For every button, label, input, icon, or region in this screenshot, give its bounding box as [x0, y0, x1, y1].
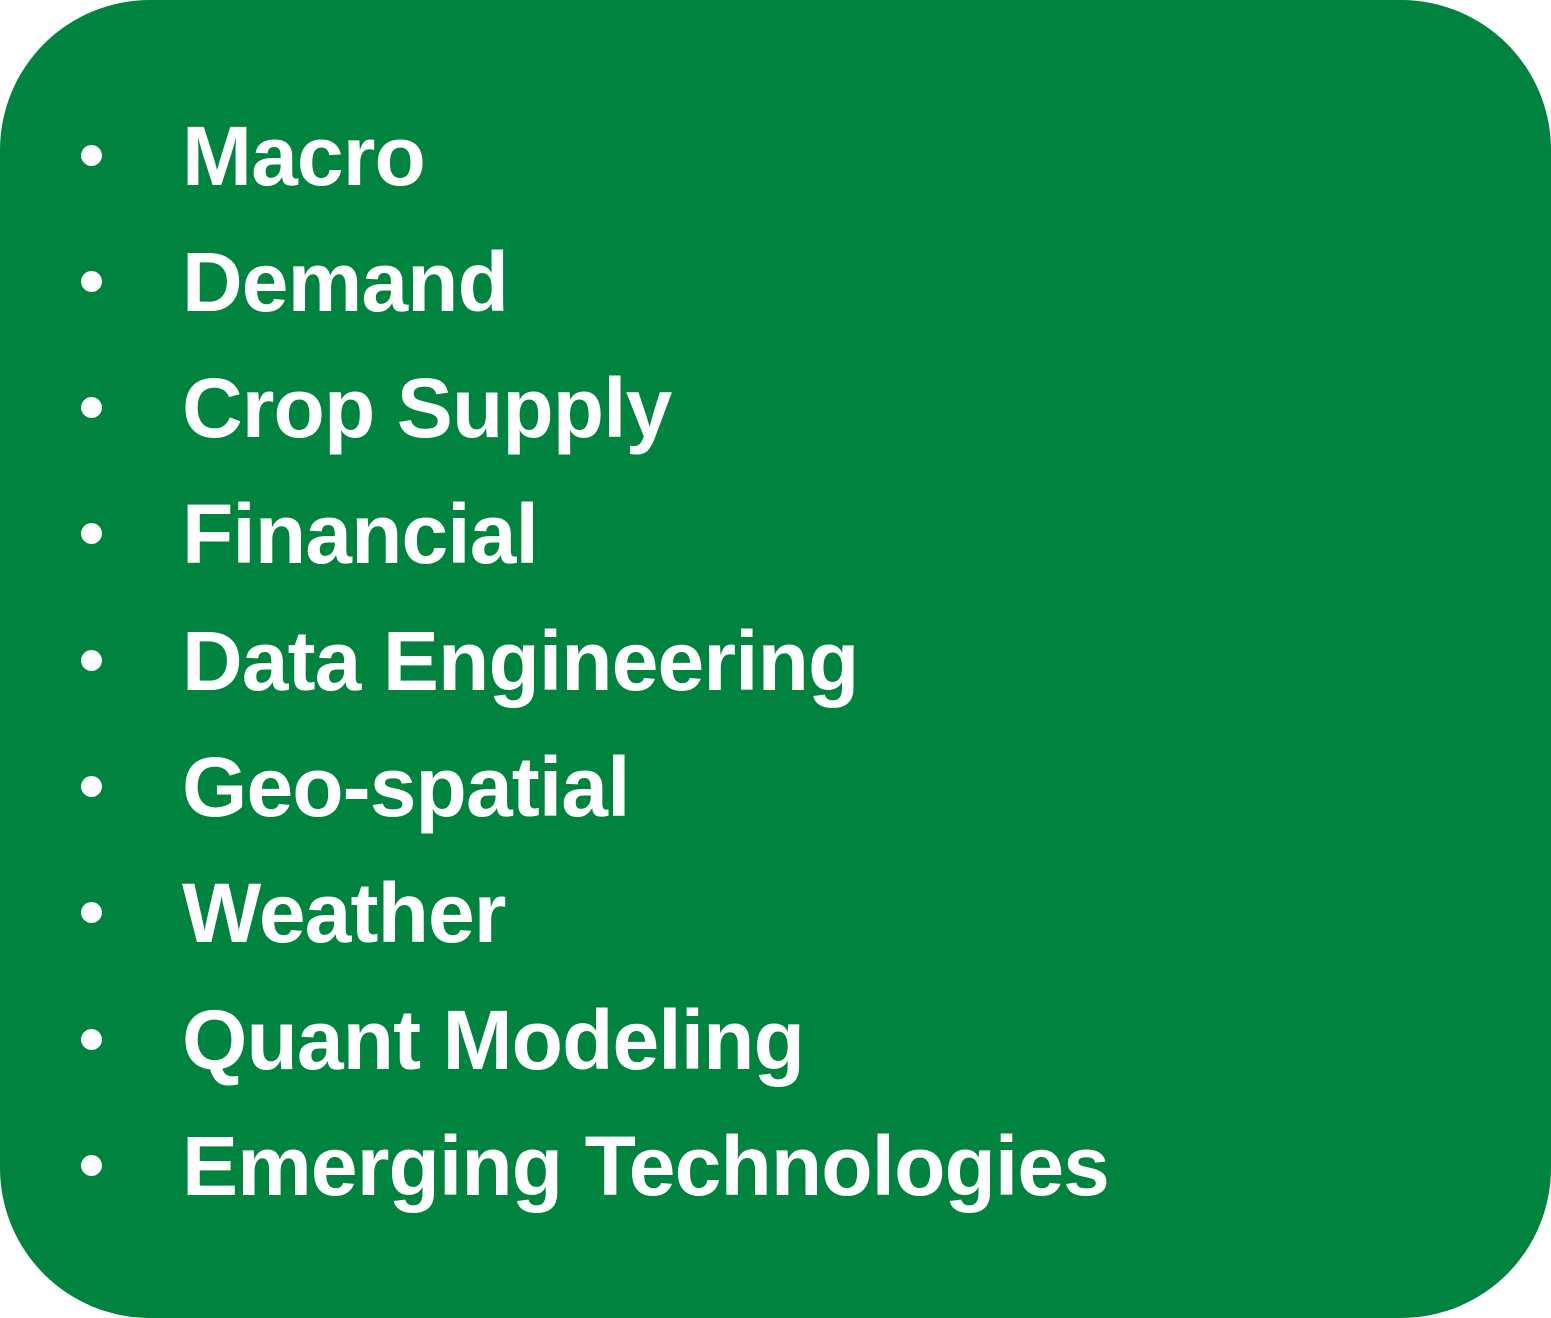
- item: Macro: Macro: [182, 109, 425, 203]
- item: Weather: Weather: [182, 866, 506, 960]
- item: Crop Supply: Crop Supply: [182, 361, 671, 455]
- item: Emerging Technologies: Emerging Technologies: [182, 1119, 1109, 1213]
- item: Quant Modeling: Quant Modeling: [182, 993, 804, 1087]
- item: Data Engineering: Data Engineering: [182, 614, 858, 708]
- item: Demand: Demand: [182, 235, 508, 329]
- item: Financial: Financial: [182, 487, 538, 581]
- item: Geo-spatial: Geo-spatial: [182, 740, 630, 834]
